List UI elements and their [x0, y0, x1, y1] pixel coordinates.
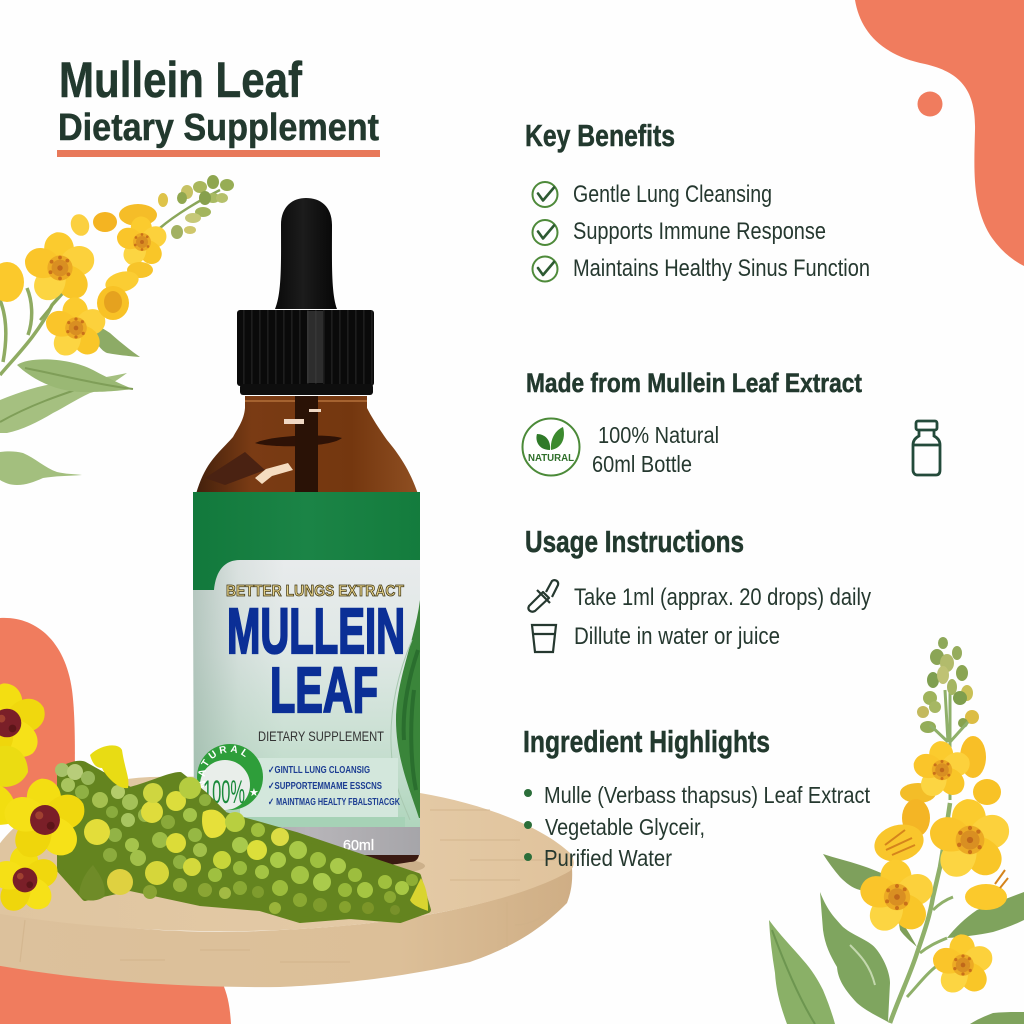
label: mullein: MULLEIN [227, 595, 405, 667]
check icon 3 [532, 256, 558, 282]
botanical illustration: lower right mullein [769, 637, 1024, 1024]
label: benefits band: ✓GINTLL LUNG CLOANSIG [268, 765, 370, 776]
blob: bottom left coral shape lower [0, 950, 231, 1024]
label: leaf: LEAF [270, 654, 378, 726]
bullet 2 [524, 821, 532, 829]
heading: Made from Mullein Leaf Extract [526, 368, 862, 398]
heading: Key Benefits [525, 118, 675, 153]
label: bottom grey band [194, 827, 420, 855]
label: natural seal [197, 744, 263, 810]
title underline [57, 150, 380, 157]
bullet 3 [524, 853, 532, 861]
benefit 3: Maintains Healthy Sinus Function [573, 255, 870, 282]
blob: coral dot [918, 92, 942, 116]
ingredient 3: Purified Water [544, 845, 672, 871]
wooden display board [0, 777, 574, 987]
botanical illustration: upper left mullein [0, 175, 234, 485]
label [193, 492, 420, 864]
check icon 2 [532, 220, 558, 245]
section: made from [522, 368, 940, 477]
glass details [205, 396, 367, 494]
subtitle: dietary supplement: Dietary Supplement [58, 107, 379, 149]
label: dietary supplement: DIETARY SUPPLEMENT [258, 728, 384, 744]
bullet 1 [524, 789, 532, 797]
product bottle [193, 198, 420, 864]
label: gold text: BETTER LUNGS EXTRACT [226, 583, 404, 600]
section: key benefits [525, 118, 870, 282]
section: usage instructions [525, 524, 871, 652]
label: natural seal: NATURAL [198, 746, 246, 788]
blob: bottom left coral shape upper [0, 618, 75, 810]
label: natural seal: ★ [249, 787, 259, 799]
icon: bottle [913, 421, 940, 475]
bottle size text: 60ml Bottle [592, 451, 692, 477]
label: benefits band [240, 758, 405, 827]
dropper cap [237, 310, 374, 395]
benefit 2: Supports Immune Response [573, 218, 826, 245]
blob: top right coral shape [855, 0, 1024, 266]
heading: Usage Instructions [525, 524, 744, 559]
icon: dropper [528, 580, 558, 612]
label: benefits band: ✓ MAINTMAG HEALTY FBALSTIACGK [268, 797, 401, 808]
benefit 1: Gentle Lung Cleansing [573, 181, 772, 208]
section: ingredient highlights [523, 724, 871, 871]
heading: Ingredient Highlights [523, 724, 770, 759]
icon: natural badge: NATURAL [528, 452, 575, 464]
natural text: 100% Natural [598, 422, 719, 448]
title block [57, 52, 380, 157]
ingredient 2: Vegetable Glyceir, [545, 814, 705, 840]
title: product name: Mullein Leaf [59, 52, 302, 108]
icon: glass [532, 625, 556, 652]
usage step 1: Take 1ml (apprax. 20 drops) daily [574, 584, 871, 611]
yellow mullein flowers on board [0, 683, 89, 916]
usage step 2: Dillute in water or juice [574, 623, 780, 650]
label: benefits band: ✓SUPPORTEMMAME ESSCNS [268, 781, 382, 792]
check icon 1 [532, 182, 558, 207]
mullein bud spike on board [55, 745, 428, 920]
dropper bulb [275, 198, 337, 309]
label: side leaf [391, 600, 420, 820]
ingredient 1: Mulle (Verbass thapsus) Leaf Extract [544, 782, 871, 808]
amber glass body [196, 396, 418, 494]
label: natural seal: 100% [203, 774, 245, 810]
label: volume: 60ml [343, 837, 374, 854]
icon: natural badge [522, 418, 580, 476]
